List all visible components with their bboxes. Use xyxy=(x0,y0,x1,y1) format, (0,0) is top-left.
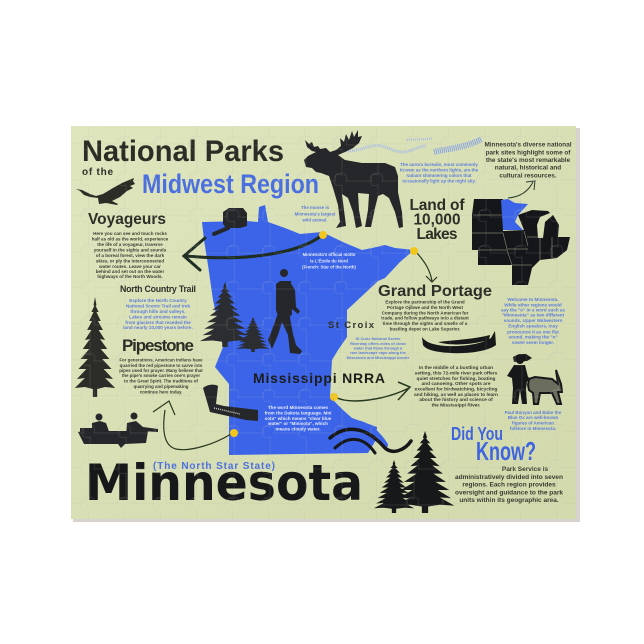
text: NRRA body: and canoeing. Other spots are xyxy=(421,381,491,387)
icon: canoe xyxy=(422,331,496,353)
text: NRRA body: setting, this 72-mile river park offers xyxy=(415,370,498,376)
heading: Minnesota: Minnesota xyxy=(85,454,363,512)
text: aurora caption: occasionally light up the night sky. xyxy=(402,178,476,184)
text: Paul Bunyan caption: folklore in Minnesota. xyxy=(510,426,556,431)
text: Pipestone body: the pipe's smoke carries one's prayer xyxy=(122,373,200,378)
heading: Voyageurs: Voyageurs xyxy=(88,211,166,228)
text: intro: natural, historical and xyxy=(495,165,561,172)
heading: Land of 10,000 Lakes: 10,000 xyxy=(414,212,460,228)
icon: peace pipe xyxy=(203,385,258,421)
text: Voyageurs body: half as old as the world, experience xyxy=(92,236,169,242)
heading: Land of 10,000 Lakes: Lakes xyxy=(416,226,458,243)
subtitle: Midwest Region: Midwest Region xyxy=(142,169,319,199)
text: North Country Trail body: land nearly 10,000 years before. xyxy=(123,325,193,330)
text: Welcome body: vowel seem longer. xyxy=(512,340,554,345)
heading: Did You Know: Know? xyxy=(476,436,536,466)
icon: hiker xyxy=(268,269,302,354)
heading: Did You Know: Did You xyxy=(451,424,503,444)
text: Did You Know body: Park Service is xyxy=(502,466,549,473)
text: Did You Know body: administratively divided into seven xyxy=(455,474,563,481)
text: intro: the state's most remarkable xyxy=(486,157,571,164)
text: Welcome body: say the "o" in a word such as xyxy=(501,308,565,312)
icon: map pine tree small xyxy=(236,317,270,352)
text: St Croix body: Riverway offers miles of clean xyxy=(350,341,407,346)
text: Welcome body: sounds, Upper Midwestern xyxy=(504,318,563,323)
text: Welcome body: While other regions would xyxy=(504,302,562,307)
text: moose caption: Minnesota's largest xyxy=(295,212,336,216)
text: state motto: Minnesota's official motto xyxy=(303,252,356,257)
text: Welcome body: Welcome to Minnesota. xyxy=(508,297,558,302)
text: Voyageurs body: the life of a voyageur, traverse xyxy=(97,242,163,247)
text: Voyageurs body: water routes. Leave your car xyxy=(98,264,161,269)
text: Voyageurs body: yourself in the sights and sounds xyxy=(94,248,167,252)
text: Grand Portage body: trade, and follow pathways into a distant xyxy=(381,316,469,320)
text: Minnesota name origin: The word Minnesota comes xyxy=(268,405,329,410)
heading: St Croix: St Croix xyxy=(328,320,375,331)
icon: left pine tree xyxy=(75,297,115,397)
text: intro: cultural resources. xyxy=(499,172,557,179)
heading: Land of 10,000 Lakes: Land of xyxy=(410,197,465,214)
text: St Croix body: St Croix National Scenic xyxy=(356,336,401,341)
text: Welcome body: "Minnesota" as two different xyxy=(502,312,565,318)
text: Voyageurs body: skies, or ply the interconnected xyxy=(96,258,164,264)
text: Pipestone body: quarried the red pipestone to carve into xyxy=(120,363,203,368)
icon: river waves xyxy=(330,423,411,453)
text: Did You Know body: units within its geographic area. xyxy=(459,497,559,504)
icon: canoe with paddlers xyxy=(78,412,158,448)
title: National Parks xyxy=(82,135,284,168)
title xyxy=(82,135,319,199)
text: intro: park sites highlight some of xyxy=(486,150,571,156)
arrow: intro to Minnesota xyxy=(508,181,535,198)
text: aurora caption: Known as the northern lights, are the xyxy=(400,168,479,172)
text: North Country Trail body: National Scenic Trail and trek xyxy=(126,304,190,308)
icon: portaging voyageur xyxy=(223,208,247,228)
text: Welcome body: sound, making the "o" xyxy=(508,335,558,340)
text: aurora caption: The aurora borealis, most commonly xyxy=(400,162,478,167)
text: NRRA body: the Mississippi River. xyxy=(432,402,480,408)
heading: Did You Know xyxy=(451,424,536,466)
arrow: NRRA xyxy=(335,382,410,401)
text: moose caption: wild animal. xyxy=(302,218,327,222)
text: St Croix body: rare landscape cape along the xyxy=(350,350,407,355)
text: Pipestone body: to the Great Spirit. The traditions of xyxy=(124,378,198,384)
text: Voyageurs body: Here you can see and touch rocks xyxy=(93,231,167,236)
text: Paul Bunyan caption: figures of American xyxy=(512,420,554,426)
text: NRRA body: about the history and science of xyxy=(419,397,493,403)
text: moose caption: The moose is xyxy=(301,205,330,210)
text: Grand Portage body: Portage Ojibwe and the North West xyxy=(387,305,463,310)
puzzle edge shadow xyxy=(73,128,580,522)
text: Paul Bunyan caption: Paul Bunyan and Babe the xyxy=(505,410,562,415)
text: Pipestone body: quarrying and pipemaking xyxy=(134,384,189,389)
subtitle: The North Star State: (The North Star State) xyxy=(153,461,275,472)
text: Grand Portage body: time through the sights and smells of a xyxy=(383,321,468,326)
icon: map pine tree large xyxy=(200,282,250,347)
text: Pipestone body: pipes used for prayer. Many believe that xyxy=(119,368,203,373)
text: North Country Trail body: Explore the North Country xyxy=(129,298,187,303)
text: North Country Trail body: Lakes and streams remain xyxy=(129,314,187,320)
heading: Mississippi NRRA: Mississippi NRRA xyxy=(253,370,385,386)
text: Voyageurs body: highways of the North Woods. xyxy=(97,274,163,279)
text: North Country Trail body: through hills and valleys. xyxy=(130,309,186,314)
text: Minnesota name origin: from the Dakota language. Mni xyxy=(265,410,331,416)
arrow: pipestone xyxy=(153,401,231,450)
text: Welcome body: English speakers, may xyxy=(508,324,558,328)
text: Grand Portage body: Explore the partnership of the Grand xyxy=(385,300,465,304)
map of Minnesota xyxy=(202,205,414,455)
icon: bottom pine tree small xyxy=(374,460,414,513)
text: Minnesota name origin: water" or "Minisota", which xyxy=(267,421,328,426)
text: Pipestone body: continue here today. xyxy=(140,390,182,394)
text: Pipestone body: For generations, American Indians have xyxy=(119,358,203,362)
heading: North Country Trail: North Country Trail xyxy=(120,284,196,294)
icon: moose xyxy=(304,130,403,228)
puzzle board background xyxy=(71,126,576,519)
text: St Croix body: water that flows through a xyxy=(353,346,403,351)
Minnesota highlight xyxy=(501,199,528,230)
text: Voyageurs body: of a boreal forest, view the dark xyxy=(96,253,165,258)
arrow: voyageurs xyxy=(184,228,321,270)
text: Did You Know body: regions. Each region provides xyxy=(462,482,556,489)
text: Welcome body: pronounce it as one flat xyxy=(507,329,559,334)
text: NRRA body: and hiking, as well as places to learn xyxy=(414,392,498,398)
text: aurora caption: radiant shimmering colors that xyxy=(406,173,472,178)
icon: bottom pine tree large xyxy=(396,431,454,513)
arrow: Grand Portage xyxy=(417,253,437,282)
icon: aurora band xyxy=(340,138,482,152)
text: NRRA body: quiet stretches for fishing, boating xyxy=(417,376,496,382)
heading: Grand Portage: Grand Portage xyxy=(378,283,492,300)
text: intro: Minnesota's diverse national xyxy=(484,142,572,148)
text: NRRA body: In the middle of a bustling urban xyxy=(419,365,493,371)
text: Grand Portage body: bustling depot on Lake Superior. xyxy=(390,326,460,332)
text: North Country Trail body: from glaciers that receded the xyxy=(125,320,191,325)
yellow location markers xyxy=(230,231,418,437)
map: Midwest region xyxy=(472,199,570,285)
text: Minnesota name origin: sota" which means "clear blue xyxy=(265,416,332,421)
heading: Land of 10,000 Lakes xyxy=(410,197,465,243)
text: Grand Portage body: Company during the North American fur xyxy=(382,310,469,316)
icon: eagle xyxy=(76,178,135,205)
text: Paul Bunyan caption: Blue Ox are well-known xyxy=(508,415,559,420)
text: Minnesota name origin: means cloudy water. xyxy=(276,426,320,432)
subtitle: of the: of the xyxy=(82,167,113,178)
icon: Paul Bunyan and Babe the Blue Ox xyxy=(507,354,562,404)
text: Did You Know body: oversight and guidance to the park xyxy=(455,489,563,496)
text: state motto: (French: Star of the North) xyxy=(302,264,356,270)
heading: Pipestone: Pipestone xyxy=(122,336,194,355)
text: Voyageurs body: behind and set out on the water xyxy=(96,269,164,274)
text: St Croix body: Wisconsin and Mississippi border xyxy=(347,355,410,360)
text: state motto: is L'Étoile du Nord xyxy=(310,258,348,264)
text: NRRA body: excellent for birdwatching, bicycling xyxy=(415,386,498,392)
